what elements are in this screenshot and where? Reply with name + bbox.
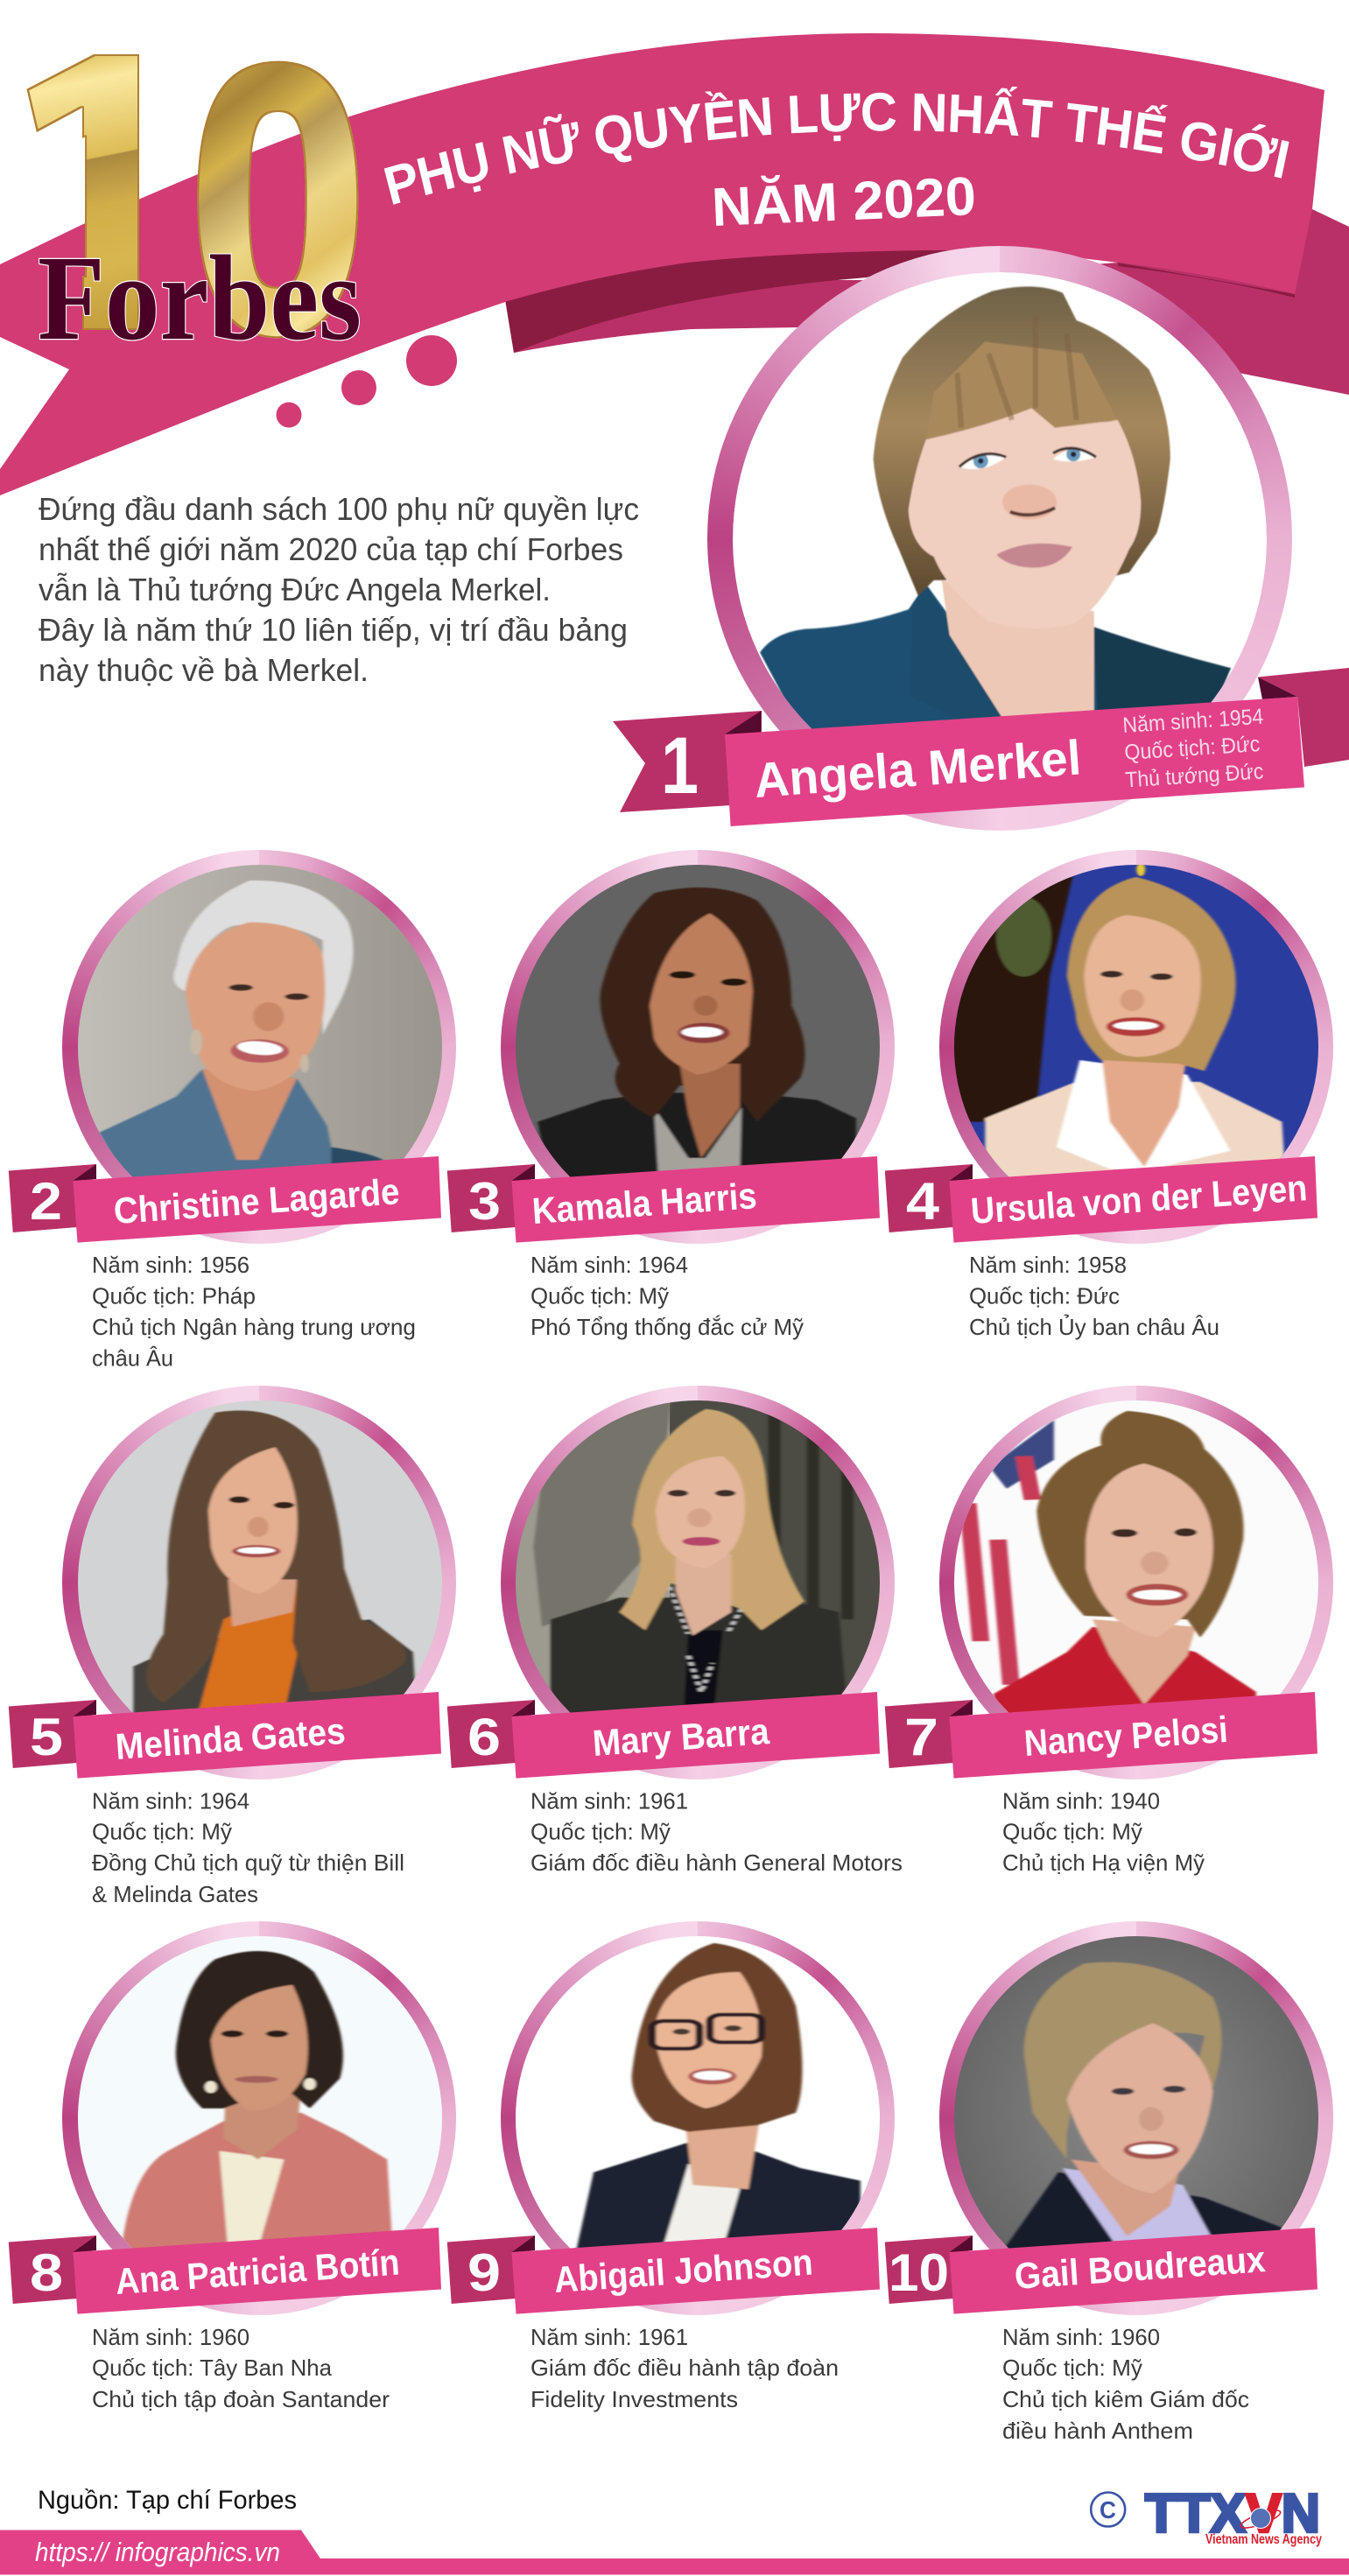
panel: rank 8 Ana Patricia Botín	[9, 1921, 456, 2412]
name: Nancy Pelosi	[1022, 1709, 1229, 1764]
details	[1122, 705, 1264, 792]
details: Năm sinh: 1940	[1002, 1787, 1160, 1814]
details: Quốc tịch: Mỹ	[1002, 1819, 1142, 1845]
ribbon main swoosh	[0, 33, 1324, 495]
portrait: Harris	[516, 865, 880, 1176]
name ribbon	[74, 2228, 441, 2314]
gold number 10	[26, 54, 359, 338]
rank number: 10	[889, 2243, 949, 2302]
details: Năm sinh: 1960	[92, 2324, 249, 2350]
copyright mark	[1091, 2493, 1125, 2526]
details: & Melinda Gates	[92, 1881, 258, 1907]
details: Fidelity Investments	[530, 2386, 738, 2412]
name ribbon	[949, 2228, 1317, 2314]
portrait: Botín	[78, 1936, 442, 2248]
wordmark: TTXVN	[1145, 2484, 1320, 2544]
details: Năm sinh: 1964	[92, 1787, 249, 1814]
copyright mark: C	[1100, 2496, 1116, 2523]
panel: rank 2 Christine Lagarde	[9, 850, 456, 1371]
title line 2: NĂM 2020	[711, 166, 977, 238]
rank tag	[885, 2236, 973, 2304]
rank number: 8	[30, 2243, 63, 2302]
details: Quốc tịch: Tây Ban Nha	[92, 2355, 333, 2381]
name ribbon	[725, 697, 1304, 826]
globe	[1239, 2507, 1282, 2531]
details: điều hành Anthem	[1002, 2418, 1193, 2444]
ribbon dark fold	[505, 249, 1295, 353]
panel: rank 5 Melinda Gates	[9, 1386, 456, 1907]
details: Năm sinh: 1958	[969, 1252, 1127, 1278]
logo: TTXVN	[1091, 2484, 1322, 2547]
details	[92, 2324, 390, 2412]
panel: rank 4 Ursula von der Leyen	[885, 850, 1333, 1340]
name: Melinda Gates	[114, 1710, 347, 1767]
details: Quốc tịch: Đức	[969, 1283, 1120, 1309]
details: Chủ tịch Ngân hàng trung ương	[92, 1314, 416, 1340]
rank tag	[885, 1700, 973, 1768]
details: Quốc tịch: Đức	[1124, 732, 1261, 765]
details: Chủ tịch tập đoàn Santander	[92, 2386, 390, 2412]
footer url: https:// infographics.vn	[35, 2537, 280, 2567]
intro paragraph	[39, 491, 639, 688]
name ribbon	[949, 1156, 1317, 1243]
decorative dots	[277, 335, 457, 427]
details	[530, 1787, 903, 1876]
rank tag	[9, 2236, 96, 2304]
rank number: 6	[467, 1708, 501, 1766]
details: Năm sinh: 1961	[530, 2324, 688, 2350]
rank number: 5	[30, 1708, 63, 1766]
rank tag	[447, 1164, 535, 1232]
portrait ring	[939, 1386, 1333, 1779]
name ribbon	[74, 1692, 441, 1779]
details: Giám đốc điều hành tập đoàn	[530, 2355, 839, 2381]
portrait ring	[501, 850, 895, 1244]
name ribbon	[511, 2228, 880, 2314]
panel: rank 7 Nancy Pelosi	[885, 1386, 1333, 1876]
portrait: Merkel	[733, 272, 1267, 728]
details: Năm sinh: 1964	[530, 1252, 688, 1278]
intro paragraph: Đây là năm thứ 10 liên tiếp, vị trí đầu bảng	[39, 612, 628, 648]
details	[530, 1252, 804, 1340]
portrait: von der Leyen	[954, 865, 1318, 1176]
details	[92, 1787, 404, 1907]
footer band	[0, 2530, 1349, 2575]
panel: rank 9 Abigail Johnson	[447, 1921, 895, 2412]
name: Kamala Harris	[530, 1175, 758, 1232]
details: Thủ tướng Đức	[1125, 759, 1264, 792]
name ribbon	[949, 1692, 1317, 1779]
details: Chủ tịch kiêm Giám đốc	[1002, 2386, 1249, 2412]
details	[92, 1252, 416, 1371]
portrait ring	[62, 1921, 456, 2315]
portrait: Barra	[516, 1400, 880, 1712]
portrait: Pelosi	[954, 1400, 1318, 1712]
details	[1002, 1787, 1205, 1876]
name: Gail Boudreaux	[1013, 2238, 1268, 2297]
details: Chủ tịch Ủy ban châu Âu	[969, 1313, 1219, 1340]
portrait ring	[939, 850, 1333, 1244]
portrait ring	[939, 1921, 1333, 2315]
rank tag	[447, 2236, 535, 2304]
intro paragraph: vẫn là Thủ tướng Đức Angela Merkel.	[39, 572, 551, 607]
details: Quốc tịch: Mỹ	[530, 1819, 671, 1845]
rank tag	[613, 711, 762, 812]
Forbes wordmark: Forbes	[38, 231, 362, 366]
intro paragraph: này thuộc về bà Merkel.	[39, 652, 369, 688]
name ribbon	[74, 1156, 441, 1243]
panel: rank 6 Mary Barra	[447, 1386, 903, 1876]
header ribbon	[0, 33, 1349, 495]
name ribbon	[511, 1156, 880, 1243]
digit 0: 0	[189, 0, 367, 410]
details: Quốc tịch: Mỹ	[1002, 2355, 1142, 2381]
rank tag	[9, 1700, 96, 1768]
name: Mary Barra	[591, 1710, 771, 1764]
details: Quốc tịch: Pháp	[92, 1283, 256, 1309]
details: châu Âu	[92, 1344, 173, 1371]
details	[1002, 2324, 1249, 2444]
rank tag	[9, 1164, 96, 1232]
portrait: Boudreaux	[954, 1936, 1318, 2248]
panel: rank 3 Kamala Harris	[447, 850, 895, 1340]
ribbon back fold	[505, 209, 1349, 395]
ribbon back right	[1258, 668, 1349, 767]
name: Angela Merkel	[752, 729, 1083, 808]
panel: rank 10 Gail Boudreaux	[885, 1921, 1333, 2444]
rank number: 3	[468, 1172, 501, 1231]
title line 1 on arc: PHỤ NỮ QUYỀN LỰC NHẤT THẾ GIỚI	[383, 86, 1289, 205]
details: Đồng Chủ tịch quỹ từ thiện Bill	[92, 1850, 404, 1876]
portrait ring	[501, 1921, 895, 2315]
details	[969, 1252, 1219, 1340]
portrait: Johnson	[516, 1936, 880, 2248]
name: Ursula von der Leyen	[969, 1167, 1309, 1232]
rank tag	[885, 1164, 973, 1232]
portrait ring	[62, 1386, 456, 1779]
rank tag	[447, 1700, 535, 1768]
name: Christine Lagarde	[112, 1170, 401, 1232]
details: Chủ tịch Hạ viện Mỹ	[1002, 1850, 1205, 1876]
details: Phó Tổng thống đắc cử Mỹ	[530, 1314, 804, 1340]
rank number: 4	[906, 1172, 940, 1231]
details: Năm sinh: 1960	[1002, 2324, 1160, 2350]
details	[530, 2324, 839, 2412]
details: Quốc tịch: Mỹ	[530, 1283, 669, 1309]
details: Năm sinh: 1961	[530, 1787, 688, 1814]
details: Giám đốc điều hành General Motors	[530, 1850, 903, 1876]
name ribbon	[511, 1692, 880, 1779]
details: Năm sinh: 1956	[92, 1252, 249, 1278]
rank number: 1	[661, 721, 699, 811]
panel: rank 1 Angela Merkel	[613, 246, 1349, 831]
intro paragraph: nhất thế giới năm 2020 của tạp chí Forbes	[39, 531, 623, 567]
portrait ring	[501, 1386, 895, 1779]
portrait ring	[707, 246, 1292, 831]
portrait: Lagarde	[78, 865, 442, 1176]
rank number: 7	[904, 1708, 938, 1766]
name: Abigail Johnson	[552, 2241, 814, 2300]
rank number: 2	[30, 1172, 62, 1231]
portrait: Gates	[78, 1400, 442, 1712]
intro paragraph: Đứng đầu danh sách 100 phụ nữ quyền lực	[39, 491, 639, 527]
details: Quốc tịch: Mỹ	[92, 1819, 232, 1845]
source note: Nguồn: Tạp chí Forbes	[38, 2486, 297, 2515]
details: Năm sinh: 1954	[1122, 705, 1264, 738]
portrait ring	[62, 850, 456, 1244]
name: Ana Patricia Botín	[114, 2241, 401, 2302]
rank number: 9	[467, 2243, 501, 2302]
